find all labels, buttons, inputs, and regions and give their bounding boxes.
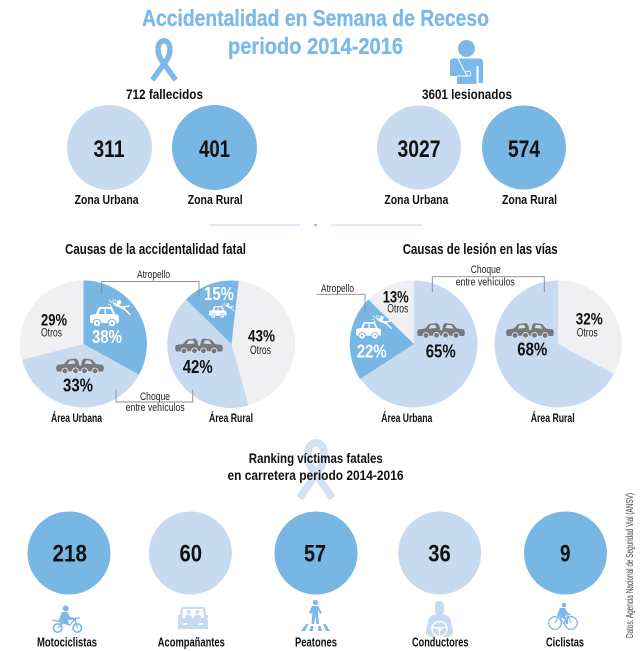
item: acompanantes xyxy=(149,512,232,650)
icon: motorcycle xyxy=(52,606,82,632)
callout: choque: entre vehículos xyxy=(456,277,515,289)
heading: ranking xyxy=(228,450,404,483)
title xyxy=(142,5,489,59)
pie: lesion urbana: 22% xyxy=(357,340,387,362)
icon: crash xyxy=(506,320,554,338)
item: peatones: Peatones xyxy=(295,636,337,650)
pie: fatal urbana xyxy=(20,280,147,408)
item: ciclistas xyxy=(524,512,607,650)
pie: fatal urbana: 38% xyxy=(92,326,122,347)
panel: causas lesion xyxy=(317,242,622,425)
circle: 311 urbana: 311 xyxy=(94,136,124,163)
circle: 401 rural: 401 xyxy=(199,136,230,163)
item: peatones: 57 xyxy=(304,541,326,568)
pie: fatal rural xyxy=(167,280,295,408)
icon: car and pedestrian xyxy=(90,299,130,327)
item: peatones xyxy=(274,512,358,650)
source note: Datos: Agencia Nacional de Seguridad Vial (ANSV) xyxy=(625,493,636,638)
pie: lesion urbana: 65% xyxy=(426,340,456,362)
pie: lesion urbana: Otros xyxy=(387,302,408,316)
icon: ranking ribbon xyxy=(300,443,332,498)
icon: crash xyxy=(417,320,465,338)
callout: atropello: Atropello xyxy=(137,269,170,281)
circle: 311 urbana: Zona Urbana xyxy=(75,193,139,207)
pie: lesion urbana xyxy=(350,280,478,408)
pie: fatal rural: 43% xyxy=(248,328,275,346)
pie: fatal urbana: Otros xyxy=(41,326,62,340)
icon: car with passengers xyxy=(178,607,208,629)
pie: fatal urbana: 33% xyxy=(63,374,93,396)
circle: 3027 urbana: Zona Urbana xyxy=(384,193,449,207)
callout: choque: entre vehículos xyxy=(126,402,185,414)
item: ciclistas: Ciclistas xyxy=(546,636,584,650)
callout: choque xyxy=(116,390,193,414)
panel: fallecidos xyxy=(67,87,257,207)
callout: atropello xyxy=(102,269,199,296)
label: area urbana: Área Urbana xyxy=(51,410,102,425)
item: motociclistas xyxy=(28,512,110,650)
pie: fatal rural: 15% xyxy=(204,283,234,304)
item: conductores: 36 xyxy=(428,541,451,568)
circle: 574 rural xyxy=(482,106,566,207)
label: area urbana: Área Urbana xyxy=(381,410,433,425)
pie: lesion rural xyxy=(494,280,622,408)
pie: fatal rural: Otros xyxy=(250,343,271,357)
item: ciclistas: 9 xyxy=(560,541,570,568)
circle: 574 rural: Zona Rural xyxy=(502,193,557,207)
callout: atropello xyxy=(317,283,365,312)
circle: 401 rural: Zona Rural xyxy=(188,193,243,207)
heading: ranking: en carretera periodo 2014-2016 xyxy=(228,467,404,483)
heading: 3601 lesionados: 3601 lesionados xyxy=(422,87,512,102)
callout: choque xyxy=(432,264,544,292)
callout: choque: Choque xyxy=(471,264,501,276)
callout: atropello: Atropello xyxy=(321,283,354,295)
pie: lesion urbana: 13% xyxy=(383,288,409,306)
icon: car and pedestrian xyxy=(356,315,391,339)
item: acompanantes: Acompañantes xyxy=(158,636,225,650)
panel: causas fatal xyxy=(20,242,295,425)
heading: 712 fallecidos: 712 fallecidos xyxy=(126,87,203,102)
title: Accidentalidad en Semana de Receso xyxy=(142,5,489,31)
item: acompanantes: 60 xyxy=(180,541,202,568)
circle: 574 rural: 574 xyxy=(508,136,541,163)
panel: lesionados xyxy=(377,87,566,207)
icon: cyclist xyxy=(549,603,577,629)
item: motociclistas: Motociclistas xyxy=(37,636,97,650)
circle: 401 rural xyxy=(172,105,257,207)
icon: ribbon xyxy=(152,41,176,80)
title: periodo 2014-2016 xyxy=(228,33,403,59)
circle: 311 urbana xyxy=(67,105,152,207)
callout: choque: Choque xyxy=(140,391,170,403)
item: motociclistas: 218 xyxy=(52,541,87,568)
pie: fatal rural: 42% xyxy=(183,356,213,377)
heading: ranking: Ranking víctimas fatales xyxy=(249,450,383,466)
heading: causas lesion: Causas de lesión en las vías xyxy=(403,242,558,258)
heading: causas fatal: Causas de la accidentalidad fatal xyxy=(65,242,246,258)
pie: lesion rural: 68% xyxy=(517,339,547,360)
icon: driver at wheel xyxy=(426,601,453,637)
pie: fatal urbana: 29% xyxy=(41,312,67,330)
item: conductores xyxy=(398,512,481,650)
pie: lesion rural: Otros xyxy=(577,326,598,340)
circle: 3027 urbana: 3027 xyxy=(398,136,440,163)
label: area rural: Área Rural xyxy=(209,410,253,425)
icon: crash xyxy=(56,356,104,374)
icon: injured person xyxy=(450,40,483,84)
item: conductores: Conductores xyxy=(412,636,469,650)
circle: 3027 urbana xyxy=(377,106,461,207)
icon: crash xyxy=(175,336,223,354)
icon: pedestrian crossing xyxy=(301,600,330,631)
pie: lesion rural: 32% xyxy=(576,310,603,328)
icon: car and pedestrian small xyxy=(209,303,234,318)
label: area rural: Área Rural xyxy=(531,410,575,425)
